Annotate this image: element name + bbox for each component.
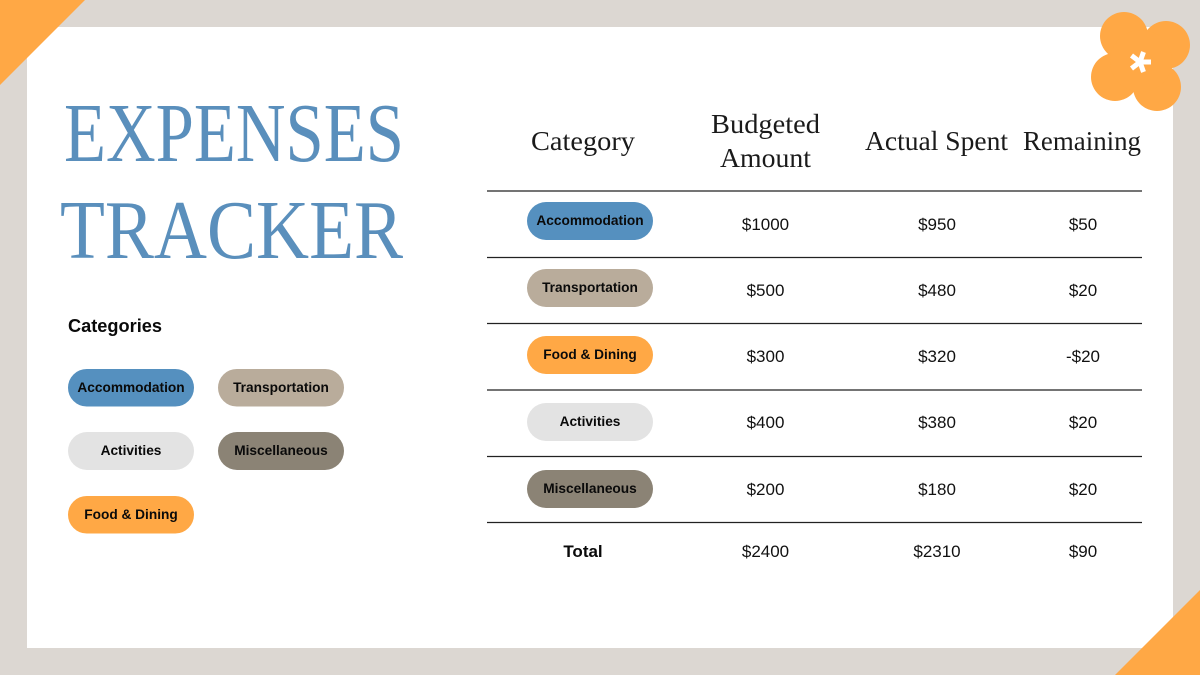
row: accommodation: $50 [1069,215,1097,234]
row: transportation: Transportation [542,280,638,295]
row: activities: $380 [918,413,956,432]
row: food and dining: $300 [747,347,784,366]
panel: categories legend [68,316,344,534]
row: transportation [527,269,1097,307]
row: miscellaneous: $200 [747,480,784,499]
row: miscellaneous: $20 [1069,480,1097,499]
row: transportation: $500 [747,281,784,300]
row: total: $2310 [913,542,961,561]
row: food and dining [527,336,1100,374]
table header row [531,109,1141,173]
legend pill: miscellaneous: Miscellaneous [234,443,328,458]
row: transportation: $480 [918,281,956,300]
row: food and dining: $320 [918,347,956,366]
legend pill: miscellaneous [218,432,344,470]
table header row: Actual Spent [865,126,1008,156]
legend pill: accommodation: Accommodation [77,380,185,395]
expenses table [487,109,1142,561]
legend pill: transportation [218,369,344,406]
row: transportation: $20 [1069,281,1097,300]
legend pill: food and dining [68,496,194,534]
row: activities [527,403,1097,441]
corner triangle: top left [0,0,85,85]
row: accommodation: $950 [918,215,956,234]
row: food and dining: Food & Dining [543,347,637,362]
legend pill: activities [68,432,194,470]
icon: orange flower with asterisk [1091,12,1190,111]
row: activities: Activities [560,414,621,429]
row: total [563,542,1097,561]
row: food and dining: -$20 [1066,347,1100,366]
row: activities: $20 [1069,413,1097,432]
row: total: $2400 [742,542,789,561]
legend heading: Categories [68,316,162,336]
row: activities: $400 [747,413,784,432]
corner triangle: bottom right [1115,590,1200,675]
row: miscellaneous: $180 [918,480,956,499]
row: total: Total [563,542,603,561]
table header row: Budgeted [711,109,821,139]
table header row: Remaining [1023,126,1141,156]
legend pill: accommodation [68,369,194,406]
row: accommodation: Accommodation [536,213,644,228]
row: miscellaneous: Miscellaneous [543,481,637,496]
row: total: $90 [1069,542,1097,561]
table header row: Category [531,126,636,156]
row: accommodation [527,202,1097,240]
row: miscellaneous [527,470,1097,508]
legend pill: transportation: Transportation [233,380,329,395]
row: accommodation: $1000 [742,215,789,234]
legend pill: food and dining: Food & Dining [84,507,178,522]
title [60,87,404,277]
title: TRACKER [60,184,403,277]
legend pill: activities: Activities [101,443,162,458]
title: EXPENSES [64,87,404,180]
table header row: Amount [720,143,811,173]
